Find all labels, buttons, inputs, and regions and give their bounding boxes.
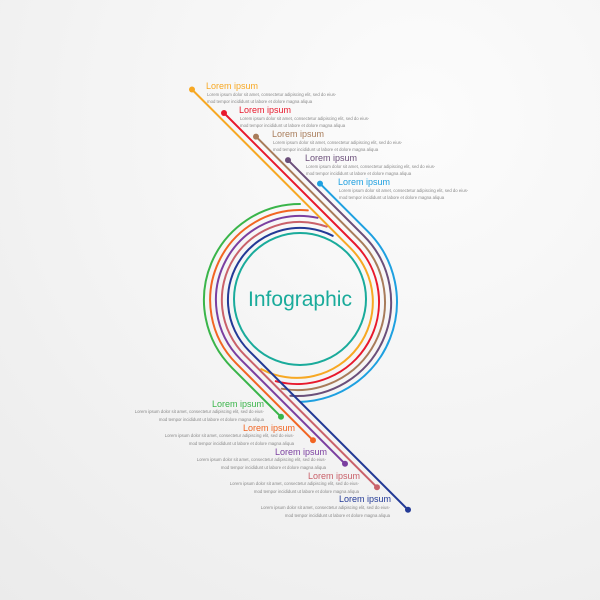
label 4 bottom: Lorem ipsum	[308, 471, 360, 481]
top line: blue	[300, 181, 397, 402]
label 5 top: Lorem ipsum dolor sit amet, consectetur adipiscing elit, sed do eius-	[339, 188, 469, 193]
top line: brown	[253, 134, 385, 390]
center circle	[234, 233, 366, 365]
label 5 top: mod tempor incididunt ut labore et dolore magna aliqua	[339, 195, 445, 200]
label 2 top: mod tempor incididunt ut labore et dolore magna aliqua	[240, 123, 346, 128]
label 1 bottom: mod tempor incididunt ut labore et dolore magna aliqua	[159, 417, 265, 422]
label 4 bottom: mod tempor incididunt ut labore et dolore magna aliqua	[254, 489, 360, 494]
label 1 top	[206, 81, 337, 104]
label 4 top: Lorem ipsum	[305, 153, 357, 163]
label 4 top: Lorem ipsum dolor sit amet, consectetur adipiscing elit, sed do eius-	[306, 164, 436, 169]
bottom line: orange	[210, 210, 316, 443]
label 3 top: Lorem ipsum	[272, 129, 324, 139]
bottom line: pink	[222, 222, 380, 490]
label 2 top: Lorem ipsum	[239, 105, 291, 115]
label 3 bottom	[197, 447, 327, 470]
label 2 bottom: Lorem ipsum	[243, 423, 295, 433]
label 5 bottom	[261, 494, 391, 518]
title: Infographic: Infographic	[248, 288, 352, 311]
label 3 top: mod tempor incididunt ut labore et dolore magna aliqua	[273, 147, 379, 152]
label 5 top: Lorem ipsum	[338, 177, 390, 187]
top line: orange	[189, 86, 373, 378]
label 5 top	[338, 177, 469, 200]
label 5 bottom: Lorem ipsum	[339, 494, 391, 504]
label 4 top	[305, 153, 436, 176]
label 4 top: mod tempor incididunt ut labore et dolore magna aliqua	[306, 171, 412, 176]
label 2 bottom: Lorem ipsum dolor sit amet, consectetur adipiscing elit, sed do eius-	[165, 433, 295, 438]
label 1 bottom: Lorem ipsum dolor sit amet, consectetur adipiscing elit, sed do eius-	[135, 409, 265, 414]
label 1 bottom	[135, 399, 265, 422]
label 1 bottom: Lorem ipsum	[212, 399, 264, 409]
label 1 top: Lorem ipsum	[206, 81, 258, 91]
label 5 bottom: mod tempor incididunt ut labore et dolore magna aliqua	[285, 513, 391, 518]
bottom line: green	[204, 204, 300, 420]
label 3 bottom: Lorem ipsum	[275, 447, 327, 457]
label 2 top	[239, 105, 370, 128]
label 3 bottom: mod tempor incididunt ut labore et dolore magna aliqua	[221, 465, 327, 470]
label 2 bottom: mod tempor incididunt ut labore et dolore magna aliqua	[189, 441, 295, 446]
label 2 top: Lorem ipsum dolor sit amet, consectetur adipiscing elit, sed do eius-	[240, 116, 370, 121]
bottom line: navy	[228, 228, 411, 513]
label 1 top: Lorem ipsum dolor sit amet, consectetur adipiscing elit, sed do eius-	[207, 92, 337, 97]
label 2 bottom	[165, 423, 295, 446]
label 3 top: Lorem ipsum dolor sit amet, consectetur adipiscing elit, sed do eius-	[273, 140, 403, 145]
label 1 top: mod tempor incididunt ut labore et dolore magna aliqua	[207, 99, 313, 104]
label 5 bottom: Lorem ipsum dolor sit amet, consectetur adipiscing elit, sed do eius-	[261, 505, 391, 510]
label 4 bottom	[230, 471, 360, 494]
label 3 bottom: Lorem ipsum dolor sit amet, consectetur adipiscing elit, sed do eius-	[197, 457, 327, 462]
top line: purple gray	[285, 157, 391, 396]
label 3 top	[272, 129, 403, 152]
top line: red	[221, 110, 379, 384]
bottom line: purple	[216, 216, 348, 467]
label 4 bottom: Lorem ipsum dolor sit amet, consectetur adipiscing elit, sed do eius-	[230, 481, 360, 486]
